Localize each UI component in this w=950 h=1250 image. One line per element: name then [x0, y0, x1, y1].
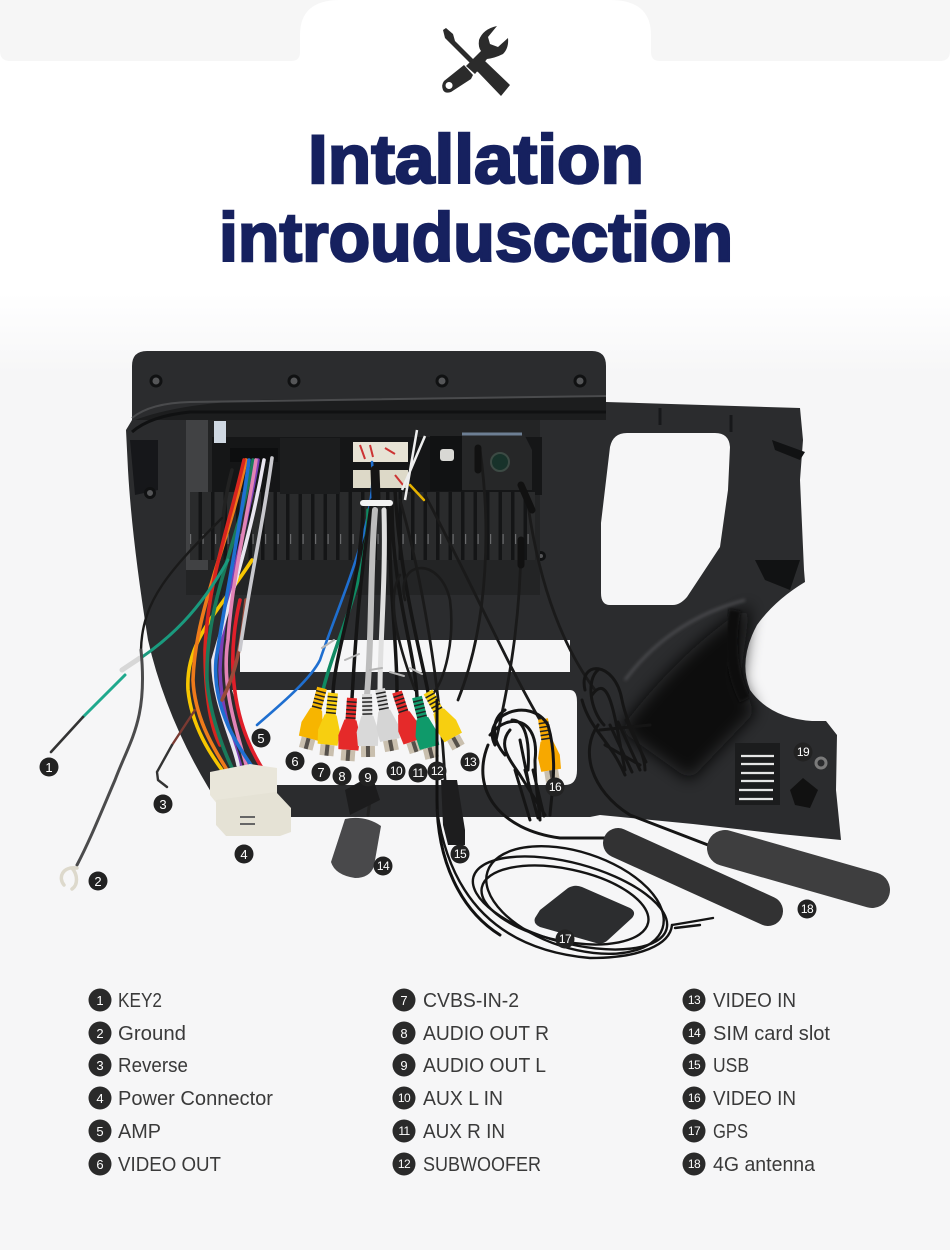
ground wire — [61, 518, 222, 889]
title: introuduscction — [219, 199, 733, 276]
photo number markers: 16 — [549, 780, 562, 794]
photo number markers: 9 — [364, 770, 372, 785]
photo number markers: 3 — [159, 797, 167, 812]
photo number markers — [40, 728, 816, 948]
photo number markers: 5 — [257, 731, 265, 746]
photo number markers: 7 — [317, 765, 325, 780]
central cable bundle — [322, 448, 595, 780]
photo number markers: 19 — [797, 745, 810, 759]
title — [219, 121, 733, 276]
photo number markers: 12 — [431, 764, 444, 778]
product photo: head unit panel with cables — [40, 351, 872, 974]
legend column 2: AUX L IN — [423, 1088, 503, 1110]
legend column 1: Ground — [118, 1023, 186, 1045]
legend column 2: AUDIO OUT L — [423, 1055, 546, 1077]
vent — [735, 743, 826, 808]
photo number markers: 15 — [454, 847, 467, 861]
sim card antenna — [331, 775, 381, 878]
legend column 2: 11 — [398, 1124, 411, 1138]
legend column 1: Power Connector — [118, 1088, 273, 1110]
rca plugs — [295, 685, 564, 783]
panel body — [126, 351, 841, 840]
legend column 2: 12 — [398, 1157, 411, 1171]
4g antennas — [618, 843, 872, 911]
legend column 2: SUBWOOFER — [423, 1154, 541, 1176]
legend column 2: 7 — [400, 993, 408, 1008]
photo number markers: 10 — [390, 764, 403, 778]
legend column 1: 6 — [96, 1157, 104, 1172]
title: Intallation — [308, 121, 644, 198]
legend column 2: 8 — [400, 1026, 408, 1041]
photo number markers: 4 — [240, 847, 248, 862]
power connector — [210, 764, 291, 836]
legend column 2: 10 — [398, 1091, 411, 1105]
photo number markers: 17 — [559, 932, 572, 946]
photo number markers: 1 — [45, 760, 53, 775]
photo number markers: 11 — [412, 766, 425, 780]
legend column 1: AMP — [118, 1121, 161, 1143]
photo number markers: 14 — [377, 859, 390, 873]
wire harness — [188, 458, 272, 772]
legend column 3: VIDEO IN — [713, 1088, 796, 1110]
legend column 1: 4 — [96, 1091, 104, 1106]
header tab band — [0, 0, 950, 61]
legend column 3: VIDEO IN — [713, 990, 796, 1012]
legend column 2: 9 — [400, 1058, 408, 1073]
legend column 1: KEY2 — [118, 990, 162, 1012]
legend column 3: 15 — [688, 1058, 701, 1072]
key2 wire — [51, 560, 228, 752]
legend column 2 — [392, 988, 549, 1176]
legend column 1: 2 — [96, 1026, 104, 1041]
photo number markers: 13 — [464, 755, 477, 769]
photo number markers: 6 — [291, 754, 299, 769]
legend column 3: 13 — [688, 993, 701, 1007]
legend column 3: 4G antenna — [713, 1154, 816, 1176]
screws — [146, 376, 585, 566]
legend column 1: 1 — [96, 993, 104, 1008]
photo number markers: 18 — [801, 902, 814, 916]
legend column 3: 14 — [688, 1026, 701, 1040]
icon: crossed wrench and screwdriver — [442, 26, 510, 96]
antenna cable coil — [582, 669, 708, 845]
legend column 1: VIDEO OUT — [118, 1154, 221, 1176]
legend column 1: Reverse — [118, 1055, 188, 1077]
gps antenna — [437, 810, 713, 974]
legend column 3 — [682, 988, 830, 1176]
legend column 3: 16 — [688, 1091, 701, 1105]
reverse wire — [157, 710, 195, 787]
photo number markers: 8 — [338, 769, 346, 784]
amp wire — [257, 462, 373, 725]
usb plug — [437, 700, 500, 935]
legend column 3: GPS — [713, 1121, 748, 1143]
legend column 1: 5 — [96, 1124, 104, 1139]
video cable coil — [483, 710, 605, 838]
legend column 1 — [88, 988, 273, 1176]
photo number markers: 2 — [94, 874, 102, 889]
legend column 2: CVBS-IN-2 — [423, 990, 519, 1012]
legend column 3: 18 — [688, 1157, 701, 1171]
legend column 3: USB — [713, 1055, 749, 1077]
rear chassis — [186, 420, 542, 595]
legend column 1: 3 — [96, 1058, 104, 1073]
legend column 3: 17 — [688, 1124, 701, 1138]
legend column 2: AUDIO OUT R — [423, 1023, 549, 1045]
legend column 2: AUX R IN — [423, 1121, 505, 1143]
panel shading — [130, 395, 805, 780]
legend column 3: SIM card slot — [713, 1023, 830, 1045]
